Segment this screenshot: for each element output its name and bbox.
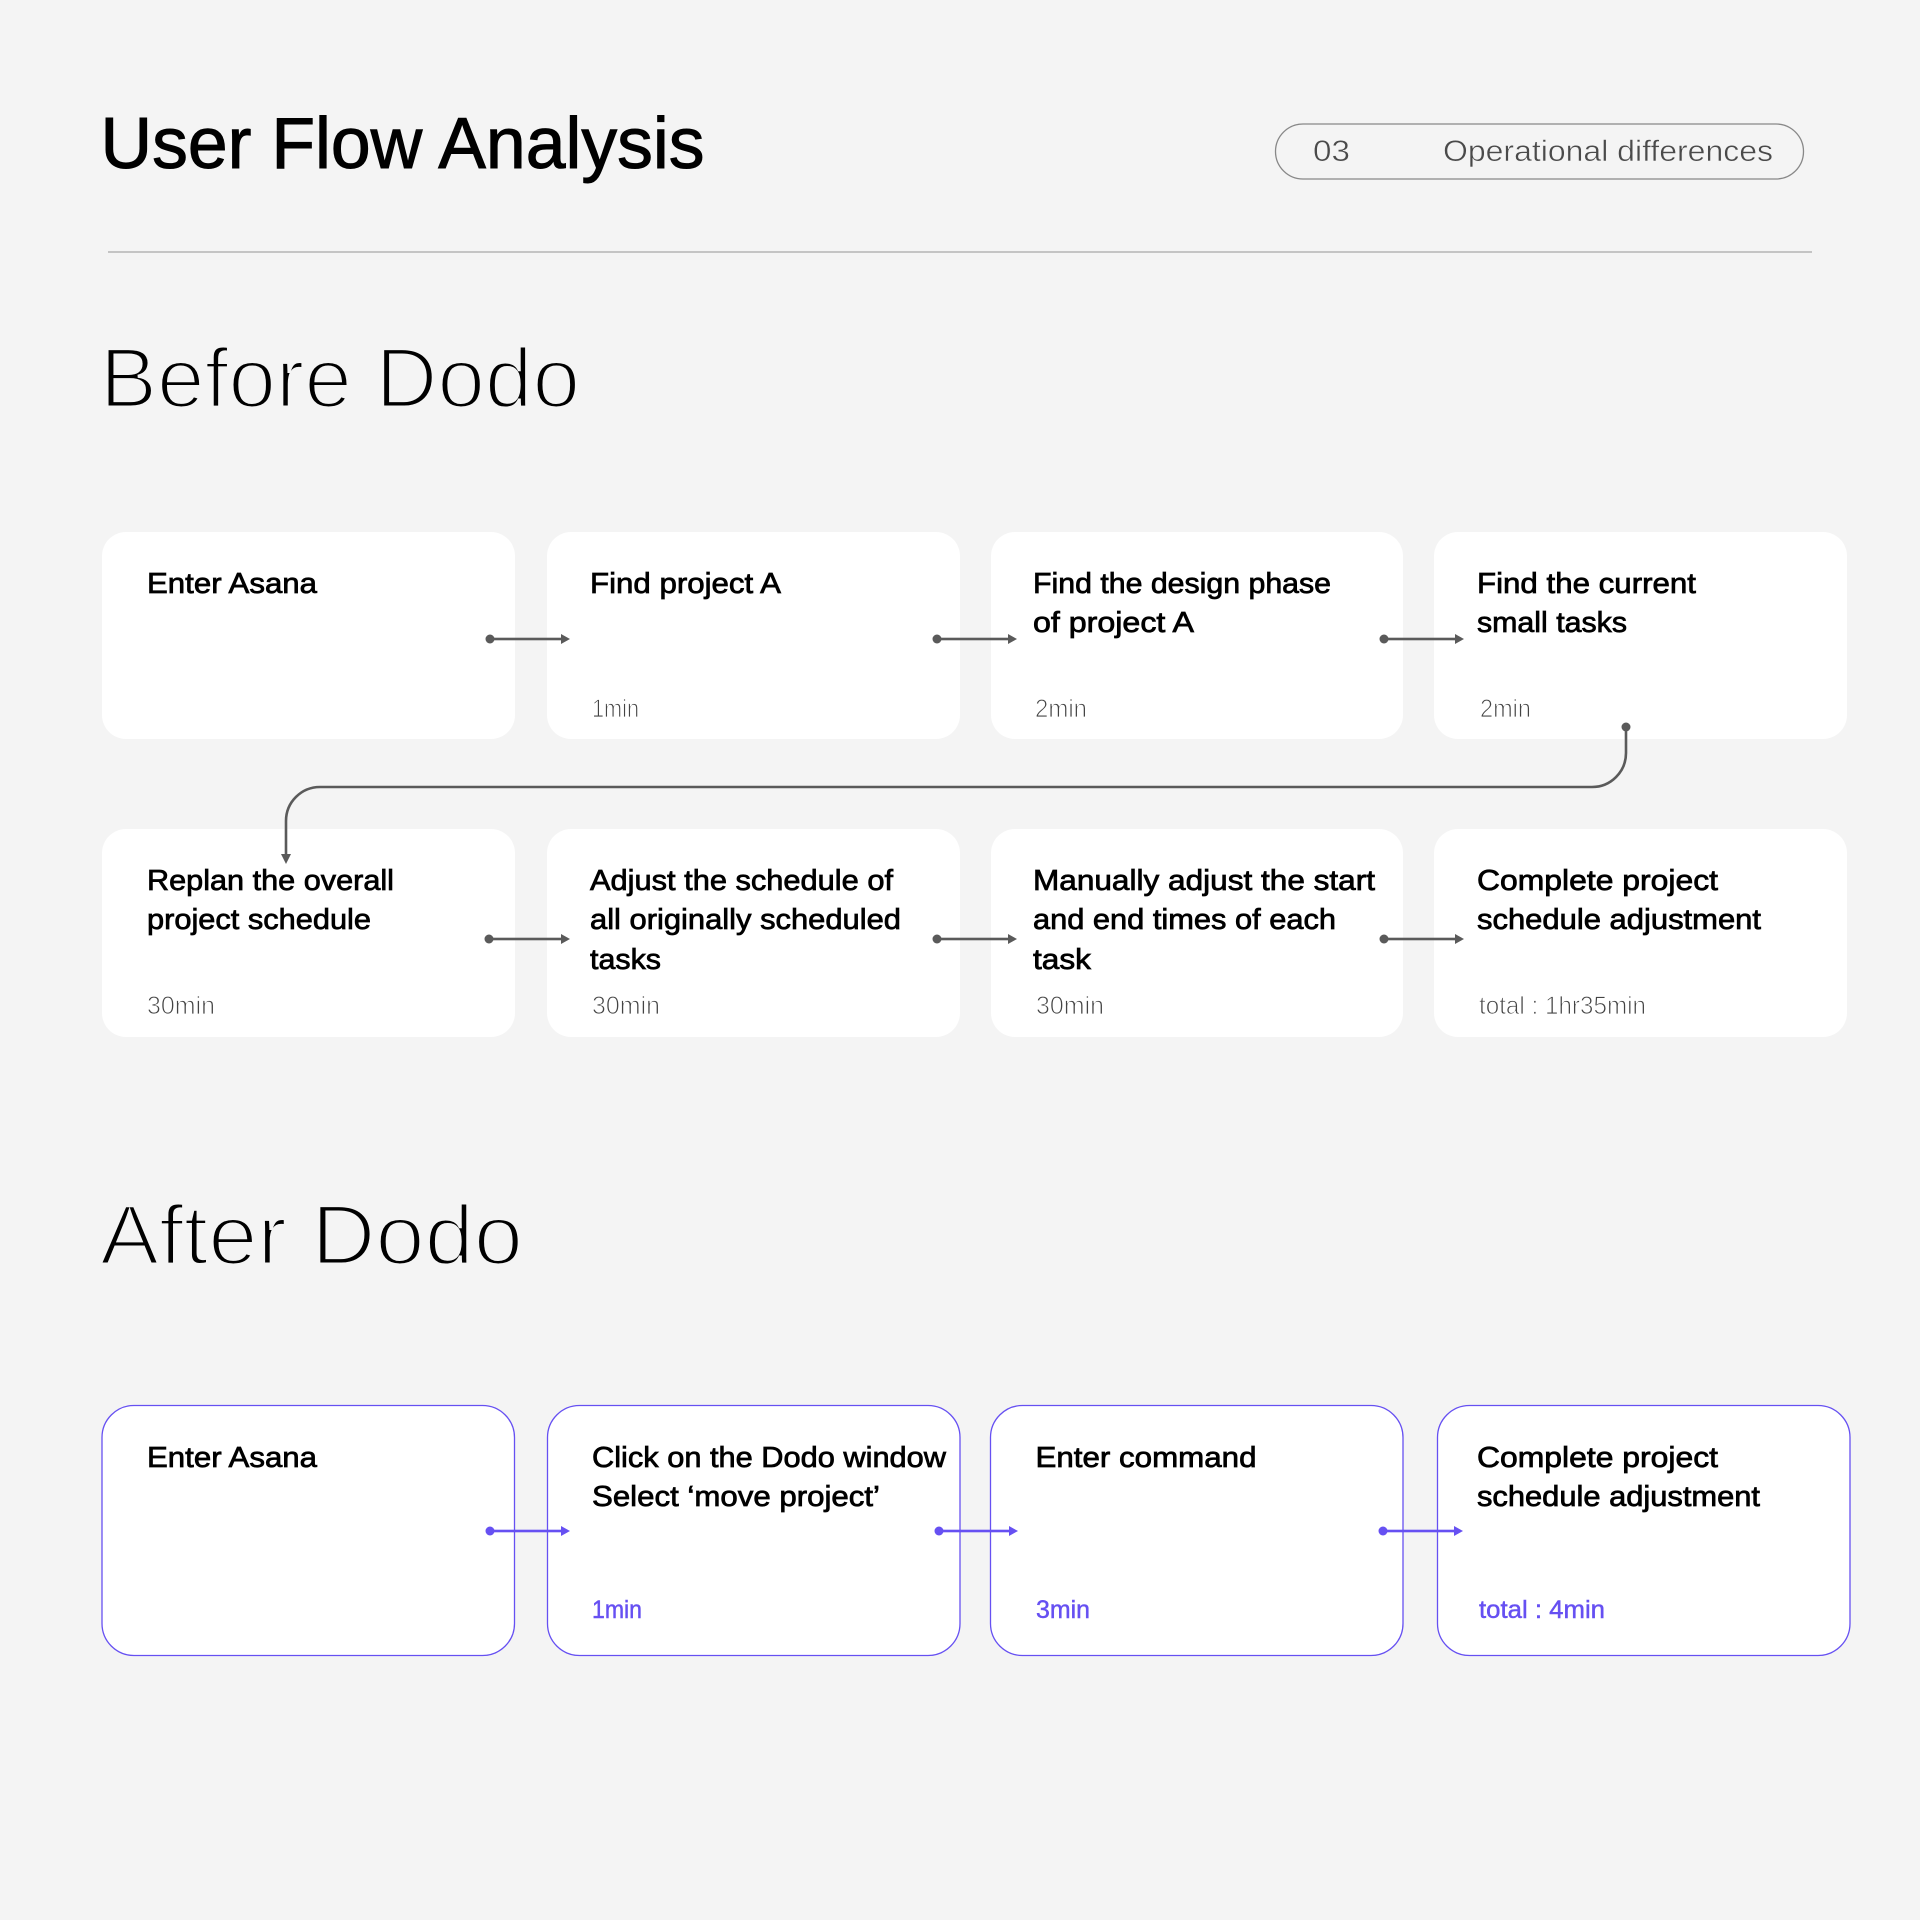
step: complete adjustment: Complete project xyxy=(1477,865,1718,897)
heading: after dodo: After Dodo xyxy=(100,1188,523,1282)
arrow: after step 3 to 4 xyxy=(1378,1526,1463,1536)
step: complete adjustment: total : 1hr35min xyxy=(1479,992,1646,1020)
step: click the dodo window: Click on the Dodo window xyxy=(592,1442,947,1474)
arrow: row connector xyxy=(281,722,1630,864)
arrow: step 1 to 2 xyxy=(486,634,570,644)
step: find project a xyxy=(547,532,960,739)
step: enter command xyxy=(990,1406,1403,1656)
step: replan the overall project schedule: project schedule xyxy=(147,904,371,936)
step: replan the overall project schedule: 30min xyxy=(147,992,215,1020)
arrow: step 3 to 4 xyxy=(1380,634,1464,644)
step: enter asana: Enter Asana xyxy=(147,568,318,600)
step: find the design phase xyxy=(991,532,1403,739)
arrow: step 2 to 3 xyxy=(932,634,1017,644)
step: find the current small tasks: Find the current xyxy=(1477,568,1696,600)
badge label: Operational differences xyxy=(1443,135,1773,168)
step: click the dodo window: Select ‘move project’ xyxy=(592,1481,880,1513)
step: complete adjustment xyxy=(1434,829,1847,1037)
step: manually adjust times: Manually adjust the start xyxy=(1033,865,1375,897)
step: enter asana: Enter Asana xyxy=(147,1442,318,1474)
step: click the dodo window xyxy=(548,1406,960,1656)
step: complete adjustment: schedule adjustment xyxy=(1477,904,1761,936)
step: adjust the schedule: tasks xyxy=(590,944,661,976)
step: replan the overall project schedule: Replan the overall xyxy=(147,865,394,897)
step: complete adjustment: schedule adjustment xyxy=(1477,1481,1760,1513)
title: User Flow Analysis xyxy=(100,104,704,184)
panel: after dodo flow xyxy=(102,1406,1850,1656)
step: find the design phase: of project A xyxy=(1033,607,1195,639)
arrow: step 7 to 8 xyxy=(1380,934,1464,944)
step: find the current small tasks: 2min xyxy=(1480,695,1531,723)
step: find the current small tasks: small tasks xyxy=(1477,607,1627,639)
arrow: step 5 to 6 xyxy=(484,934,570,944)
badge number: 03 xyxy=(1313,135,1350,168)
step: find project a: Find project A xyxy=(590,568,782,600)
step: enter asana xyxy=(102,1406,514,1656)
step: adjust the schedule: Adjust the schedule of xyxy=(590,865,894,897)
step: replan the overall project schedule xyxy=(102,829,515,1037)
arrow: step 6 to 7 xyxy=(932,934,1017,944)
badge outline xyxy=(1276,124,1804,179)
step: adjust the schedule: 30min xyxy=(592,992,660,1020)
step: enter asana xyxy=(102,532,515,739)
step: enter command: 3min xyxy=(1036,1596,1090,1624)
step: complete adjustment: Complete project xyxy=(1477,1442,1718,1474)
step: manually adjust times: and end times of each xyxy=(1033,904,1336,936)
heading: before dodo: Before Dodo xyxy=(100,331,580,425)
step: find the design phase: Find the design phase xyxy=(1033,568,1331,600)
step: find the current small tasks xyxy=(1434,532,1847,739)
step: manually adjust times: 30min xyxy=(1036,992,1104,1020)
step: find project a: 1min xyxy=(592,695,639,723)
step: click the dodo window: 1min xyxy=(592,1596,642,1624)
step: enter command: Enter command xyxy=(1036,1442,1256,1474)
arrow: after step 1 to 2 xyxy=(486,1526,570,1536)
section badge xyxy=(1276,124,1804,179)
step: find the design phase: 2min xyxy=(1035,695,1087,723)
step: adjust the schedule: all originally scheduled xyxy=(590,904,901,936)
step: complete adjustment: total : 4min xyxy=(1479,1596,1605,1624)
step: complete adjustment xyxy=(1438,1406,1850,1656)
step: manually adjust times xyxy=(991,829,1403,1037)
step: adjust the schedule xyxy=(547,829,960,1037)
step: manually adjust times: task xyxy=(1033,944,1092,976)
panel: before dodo flow xyxy=(102,532,1847,1037)
arrow: after step 2 to 3 xyxy=(934,1526,1018,1536)
